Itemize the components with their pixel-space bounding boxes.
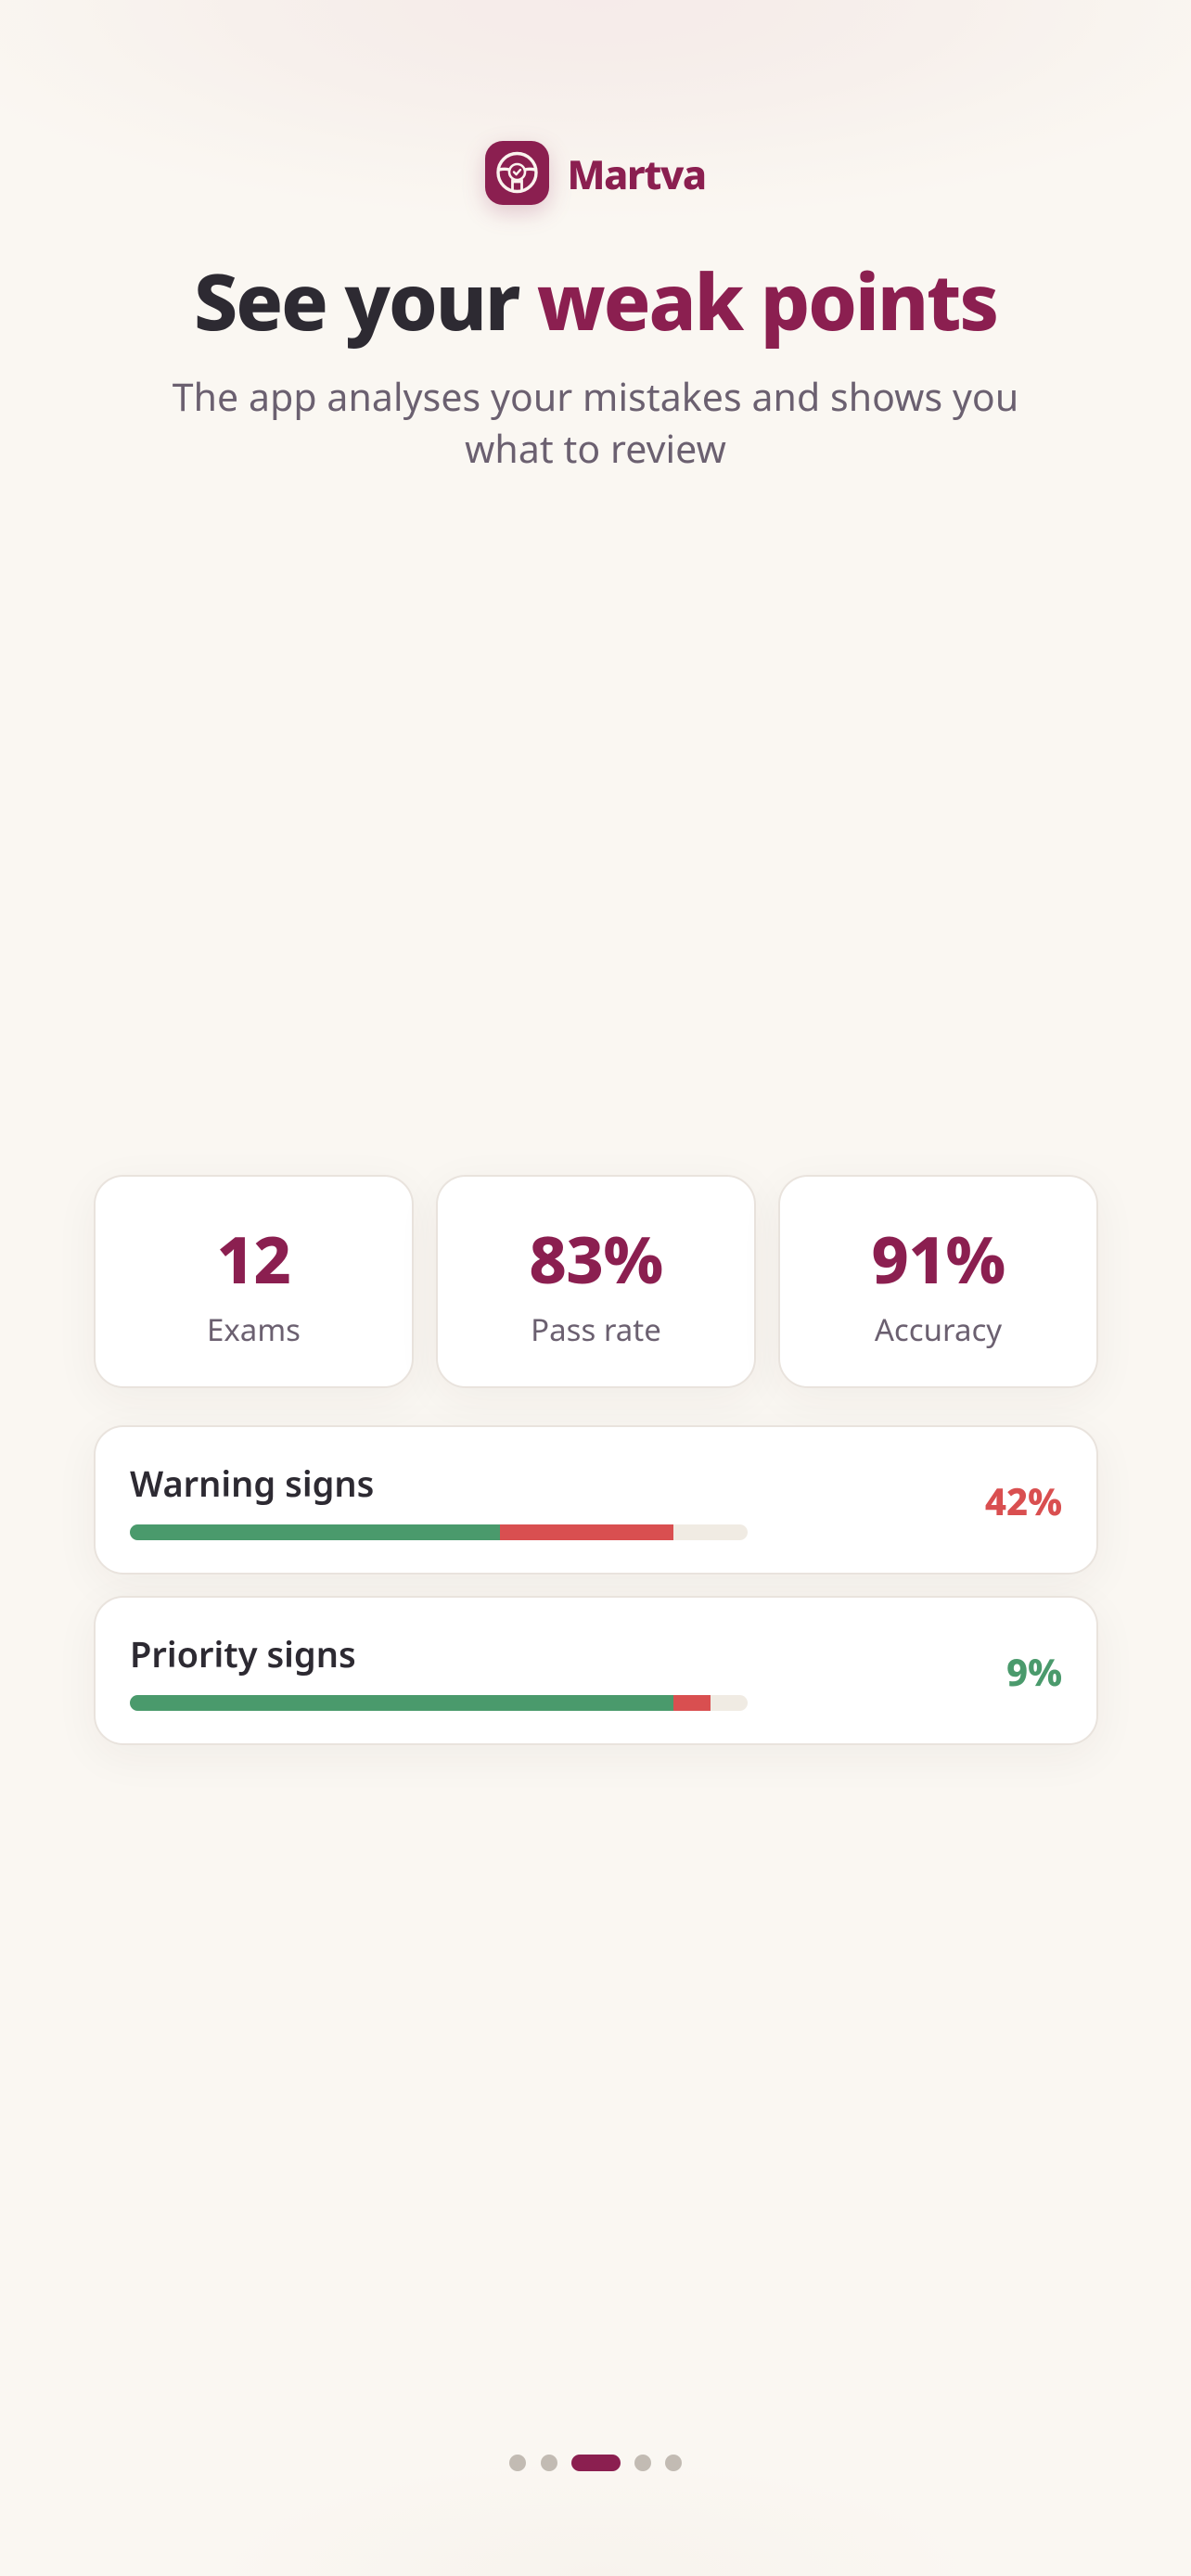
stat card: exams xyxy=(94,1175,414,1388)
subtitle xyxy=(173,371,1018,475)
title: See your weak points xyxy=(194,247,997,353)
row label: Warning signs xyxy=(130,1460,374,1508)
stat card: pass rate xyxy=(436,1175,756,1388)
pagination dots xyxy=(509,2455,682,2471)
value: 12 xyxy=(216,1214,291,1303)
stat card: accuracy xyxy=(778,1175,1098,1388)
value: 83% xyxy=(529,1214,663,1303)
subtitle: The app analyses your mistakes and shows you xyxy=(173,371,1018,423)
panel: warning signs xyxy=(94,1425,1098,1575)
panel: priority signs xyxy=(94,1596,1098,1745)
label: Exams xyxy=(207,1308,301,1350)
brand name: Martva xyxy=(568,147,706,201)
logo xyxy=(475,138,706,223)
row label: Priority signs xyxy=(130,1630,356,1678)
subtitle: what to review xyxy=(465,423,726,475)
icon: steering wheel with check xyxy=(475,138,559,223)
progress bar xyxy=(130,1524,748,1540)
background glow: bottom xyxy=(0,2439,1191,2576)
label: Pass rate xyxy=(531,1308,661,1350)
progress bar xyxy=(130,1695,748,1711)
label: Accuracy xyxy=(875,1308,1002,1350)
row value: 9% xyxy=(1006,1646,1062,1697)
background glow: top xyxy=(0,0,1191,241)
value: 91% xyxy=(871,1214,1005,1303)
row value: 42% xyxy=(985,1475,1062,1526)
